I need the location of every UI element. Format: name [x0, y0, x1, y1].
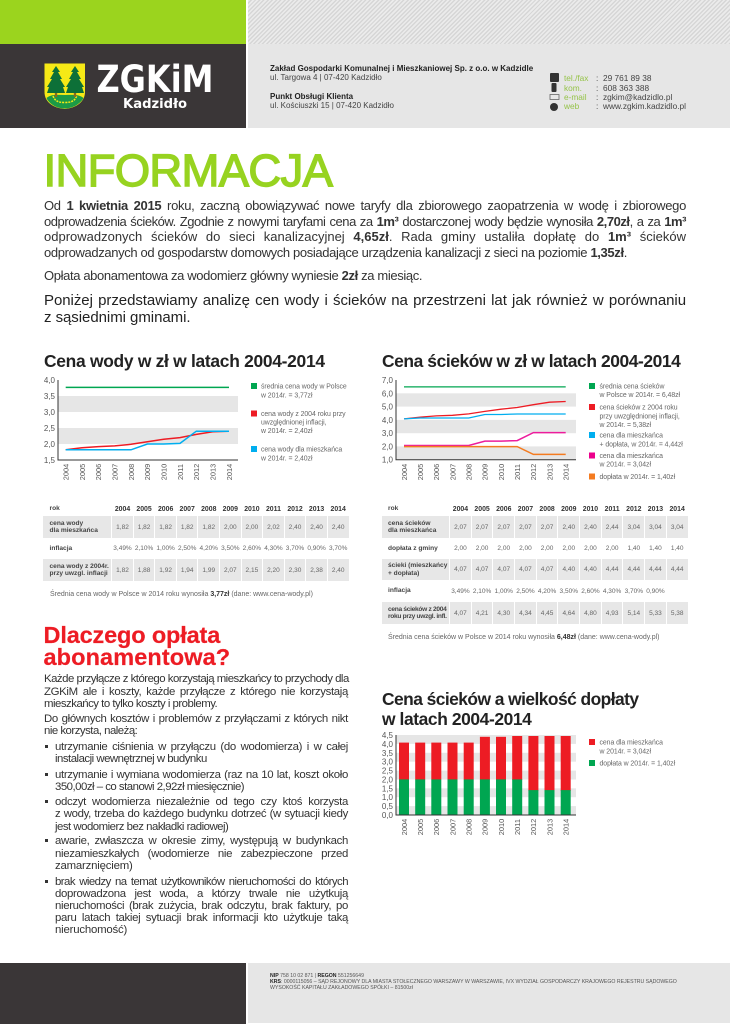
legend: water price: w 2014r. = 2,40zł [260, 428, 313, 435]
heading: why the subscription fee: abonamentowa? [44, 644, 230, 670]
chart: stacked bars: 2012 [529, 819, 538, 835]
list of problems: niezamieszkałych (wodomierze nie zabezpieczone przed [55, 848, 348, 860]
title: INFORMACJA [44, 145, 332, 196]
chart: sewage price line chart [382, 376, 576, 480]
chart: stacked bars: 2005 [416, 819, 425, 835]
list of problems: z wody, trzeba do każdego budynku dotrzeć (w sytuacji kiedy [55, 808, 348, 820]
table: sewage price: cena ścieków [388, 520, 431, 527]
table: sewage price: 2007 [518, 506, 533, 512]
table: sewage price: 2,60% [581, 588, 600, 594]
table: water price: 0,90% [307, 545, 326, 552]
table: sewage price: + dopłata) [388, 570, 419, 576]
table: sewage price: 2,00 [606, 545, 618, 552]
list of problems: awarie, zwłaszcza w okresie zimy, występują w budynkach [55, 835, 348, 847]
intro text: odprowadzonych ścieków do sieci kanalizacyjnej 4,65zł. Rada gminy ustaliła dopłatę do 1m³ ścieków [44, 229, 686, 244]
legend: water price: cena wody dla mieszkańca [261, 446, 342, 454]
table: sewage price: 2004 [453, 506, 468, 512]
table: sewage price: 4,40 [562, 566, 575, 573]
list of problems: nieruchomości (brak zużycia, brak odczytu, brak faktury, po [55, 900, 348, 912]
table: sewage price: 2,00 [562, 545, 575, 552]
table: sewage price: 3,04 [649, 524, 662, 530]
table: sewage price: 2,07 [541, 524, 553, 530]
chart: stacked bars: 4,5 [382, 731, 394, 740]
chart: water price line chart: 2010 [160, 464, 168, 480]
chart: sewage price line chart: 1,0 [382, 456, 394, 465]
company address: Punkt Obsługi Klienta [270, 92, 353, 101]
table: sewage price: 4,80 [584, 610, 597, 616]
chart: stacked bars: 2,0 [382, 775, 394, 784]
chart: stacked bars: 2,5 [382, 767, 394, 776]
table: sewage price: 2013 [648, 506, 663, 512]
list of problems: doprowadzona jest woda, a którzy trwale nie użytkują [55, 888, 348, 900]
chart: sewage price line chart: 2006 [432, 464, 441, 480]
table: sewage price: 2,40 [562, 524, 575, 530]
chart: water price line chart: 2005 [78, 464, 87, 480]
table: sewage price: 4,64 [562, 610, 575, 616]
table: sewage price: 3,50% [560, 588, 578, 594]
table: sewage price: 2012 [626, 506, 641, 512]
legend: sewage price: w 2014r. = 3,04zł [598, 462, 651, 468]
text block: why the subscription fee: Każde przyłącze z którego korzystają mieszkańcy to przychody dla [44, 673, 349, 685]
table: sewage price: 4,40 [584, 566, 597, 573]
legend: sewage price: średnia cena ścieków [600, 384, 664, 390]
table: sewage price: 5,38 [671, 610, 683, 616]
legend: sewage price: przy uwzględnionej inflacji, [600, 414, 680, 420]
table: sewage price: 5,14 [627, 610, 640, 616]
table: sewage price: 2005 [474, 506, 490, 512]
legend: sewage price: w Polsce w 2014r. = 6,48zł [598, 392, 680, 399]
contact details: e-mail [564, 92, 587, 102]
table: sewage price: 2,00 [454, 545, 467, 552]
table: sewage price: 4,44 [649, 566, 662, 573]
header band [0, 0, 730, 128]
company address: ul. Targowa 4 | 07-420 Kadzidło [270, 73, 382, 82]
contact details: 608 363 388 [603, 82, 649, 92]
table: water price: 1,82 [116, 566, 129, 574]
contact details: : [596, 82, 598, 92]
table: sewage price: 2,07 [519, 524, 532, 530]
list of problems: odczyt wodomierza niezależnie od tego czy ktoś korzysta [55, 796, 348, 808]
chart: sewage price line chart: 2007 [448, 464, 457, 480]
chart: water price line chart: 2006 [94, 464, 103, 480]
legend: water price: w 2014r. = 3,77zł [260, 392, 313, 400]
table: water price: 2,50% [178, 545, 196, 552]
table: water price: 4,30% [264, 545, 283, 552]
table: water price: 1,82 [202, 524, 215, 530]
table: water price: 2,40 [332, 566, 344, 574]
text block: why the subscription fee: nie korzysta, należą: [44, 725, 137, 737]
list of problems: brak wiedzy na temat użytkowników nieruchomości do których [55, 876, 348, 888]
table: water price: 1,88 [138, 566, 150, 574]
legend: sewage price: w 2014r. = 5,38zł [598, 422, 651, 429]
table: sewage price: 1,40 [671, 545, 683, 552]
list of problems: jest wodomierz bez nakładki radiowej) [55, 821, 228, 833]
footer company registration text: NIP 758 10 02 871 | REGON 551256649 [270, 972, 364, 978]
legend: stacked bars: dopłata w 2014r. = 1,40zł [600, 760, 676, 768]
table: sewage price: 2006 [496, 506, 511, 512]
legend: sewage price: cena ścieków z 2004 roku [600, 404, 678, 412]
intro text [44, 198, 686, 326]
heading: water price: Cena wody w zł w latach 2004-2014 [44, 351, 325, 371]
table: water price [43, 505, 349, 581]
legend: water price: w 2014r. = 2,40zł [260, 456, 313, 462]
legend: water price [251, 383, 347, 462]
table: sewage price: 2011 [605, 506, 620, 512]
chart: stacked bars: 2014 [562, 819, 570, 835]
table: sewage price: 4,30% [603, 588, 621, 594]
logo place name: Kadzidło [123, 96, 187, 112]
list of problems: utrzymanie i wymiana wodomierza (raz na 10 lat, koszt około [55, 769, 348, 781]
table: sewage price: 1,00% [495, 588, 513, 594]
chart: water price line chart: 3,0 [44, 408, 56, 417]
chart: water price line chart: 2014 [225, 464, 234, 480]
chart: stacked bars: 2013 [545, 819, 554, 835]
table: sewage price: inflacja [388, 587, 411, 594]
chart: sewage price line chart: 2009 [481, 464, 490, 480]
intro text: Opłata abonamentowa za wodomierz główny wyniesie 2zł za miesiąc. [44, 268, 422, 283]
table: sewage price: rok [388, 505, 398, 512]
table: water price: 2,30 [289, 566, 301, 574]
table: water price: 2,15 [246, 566, 258, 574]
legend: water price: uwzględnionej inflacji, [261, 420, 327, 426]
table: water price: 2,10% [135, 545, 153, 552]
table: water price: 3,50% [221, 545, 240, 552]
table: water price: 1,00% [156, 545, 175, 552]
contact details: zgkim@kadzidlo.pl [603, 92, 672, 102]
chart: sewage price line chart: 6,0 [382, 389, 394, 398]
chart: stacked bars: 2008 [464, 819, 474, 835]
contact details: www.zgkim.kadzidlo.pl [603, 101, 686, 111]
table: sewage price: 2,00 [519, 545, 532, 552]
table: water price: 2006 [158, 506, 173, 512]
table: water price: 4,20% [200, 545, 218, 552]
chart: water price line chart: 2008 [127, 464, 136, 480]
chart: stacked bars: 2011 [513, 819, 522, 835]
chart: stacked bars: 3,0 [382, 758, 394, 767]
chart: water price line chart: 2009 [143, 464, 152, 480]
table: sewage price: 3,70% [625, 588, 643, 594]
footer company registration text [270, 972, 677, 991]
table: water price: 2,00 [246, 524, 258, 530]
chart: sewage price line chart: 2004 [400, 464, 409, 480]
chart: stacked bars: 0,5 [382, 802, 394, 811]
contact details [564, 72, 686, 111]
legend: stacked bars: cena dla mieszkańca [600, 740, 663, 746]
chart: water price line chart [44, 376, 238, 480]
text block: why the subscription fee [44, 673, 350, 936]
chart: stacked bars: 2010 [497, 819, 506, 835]
chart: sewage price line chart: 2005 [416, 464, 425, 480]
contact details: kom. [564, 82, 582, 92]
icon: coat of arms shield [44, 64, 85, 109]
table: water price: 1,82 [116, 524, 129, 530]
heading: sewage price: Cena ścieków w zł w latach 2004-2014 [382, 351, 680, 371]
footer company registration text: KRS: 0000115056 – SĄD REJONOWY DLA MIASTA STOŁECZNEGO WARSZAWY W WARSZAWIE, IVX WYDZIAŁ GOSPODARCZY KRAJOWEGO REJESTRU SĄDOWEGO [270, 979, 677, 985]
dark logo block [0, 44, 246, 128]
table: sewage price: 2,44 [606, 524, 618, 530]
chart: sewage price line chart: 2011 [513, 464, 522, 480]
heading: sewage and subsidy: w latach 2004-2014 [382, 709, 531, 729]
table: sewage price: 4,07 [476, 566, 488, 573]
intro text: odprowadzenia ścieków. Zgodnie z nowymi taryfami cena za 1m³ dostarczonej wody będzie wynosiła 2,70zł, a za 1m³ [44, 214, 686, 229]
chart: sewage price line chart: 2,0 [382, 442, 394, 451]
table: sewage price: 2,00 [541, 545, 553, 552]
footer dark block [0, 963, 246, 1024]
chart: water price line chart: 2012 [192, 464, 201, 480]
table: water price: cena wody [50, 520, 83, 527]
chart: stacked bars: 2006 [432, 819, 441, 835]
contact details: : [596, 72, 598, 82]
contact details: 29 761 89 38 [603, 72, 651, 82]
list of problems: 350,00zł – co stanowi 2,92zł miesięcznie) [55, 781, 244, 793]
note: sewage price: Średnia cena ścieków w Polsce w 2014 roku wynosiła 6,48zł (dane: www.cena-wody.pl) [388, 634, 659, 641]
chart: water price line chart: 2004 [62, 464, 70, 480]
table: sewage price: 4,07 [454, 610, 467, 616]
table: water price: cena wody z 2004r. [50, 563, 109, 570]
legend: water price: średnia cena wody w Polsce [261, 384, 347, 390]
legend: sewage price: cena dla mieszkańca [600, 432, 663, 440]
heading: why the subscription fee [44, 622, 230, 670]
table: water price: 1,92 [159, 566, 172, 574]
table: sewage price: 4,07 [454, 566, 467, 573]
table: sewage price: 2,40 [584, 524, 597, 530]
table: sewage price: 2010 [583, 506, 598, 512]
company address [270, 64, 533, 110]
chart: stacked bars: 1,0 [382, 793, 394, 802]
table: water price: 2014 [330, 506, 346, 512]
table: water price: 2,40 [310, 524, 323, 530]
table: sewage price: 2014 [669, 506, 685, 512]
chart: sewage price line chart: 2014 [562, 464, 570, 480]
table: water price: 2008 [201, 506, 216, 512]
table: water price: 2,20 [267, 566, 280, 574]
table: water price: 3,70% [286, 545, 304, 552]
table: sewage price: 4,30 [497, 610, 510, 616]
table: water price: rok [50, 505, 60, 512]
table: water price: 2,00 [224, 524, 237, 530]
table: sewage price: 2,07 [454, 524, 467, 530]
table: sewage price: 2,50% [516, 588, 535, 594]
chart: stacked bars: 1,5 [382, 784, 394, 793]
chart: sewage price line chart: 2008 [464, 464, 474, 480]
green top block [0, 0, 246, 44]
table: water price: 2013 [309, 506, 324, 512]
legend: sewage price: + dopłata, w 2014r. = 4,44zł [600, 442, 683, 448]
table: water price: 3,70% [329, 545, 347, 552]
legend: sewage price [589, 383, 683, 481]
intro text: odprowadzanych od gospodarstw domowych posiadające urządzenia kanalizacji z sieci na poziomie 1,35zł. [44, 245, 627, 260]
legend: sewage price: dopłata w 2014r. = 1,40zł [600, 474, 676, 481]
legend: stacked bars: w 2014r. = 3,04zł [598, 748, 651, 756]
chart: sewage price line chart: 2010 [497, 464, 506, 480]
table: sewage price: 4,93 [606, 610, 618, 616]
intro text: Od 1 kwietnia 2015 roku, zaczną obowiązywać nowe taryfy dla zbiorowego zaopatrzenia w wodę i zbiorowego [44, 198, 686, 213]
table: sewage price: 2,00 [584, 545, 597, 552]
legend: sewage price: cena dla mieszkańca [600, 453, 663, 460]
footer band [0, 963, 730, 1024]
contact icons [550, 73, 560, 111]
chart: sewage price line chart: 5,0 [382, 403, 394, 412]
table: sewage price: 4,07 [497, 566, 510, 573]
chart: water price line chart: 2013 [208, 464, 218, 480]
table: sewage price: 4,20% [538, 588, 556, 594]
light contact block [248, 44, 730, 128]
table: water price: 2,07 [224, 566, 237, 574]
table: sewage price: 4,44 [606, 566, 618, 573]
contact details: : [596, 101, 598, 111]
text block: why the subscription fee: Do głównych kosztów i problemów z przyłączami z których nikt [44, 713, 348, 725]
chart: stacked bars [382, 731, 576, 835]
chart: water price line chart: 2,5 [44, 424, 56, 433]
chart: stacked bars: 3,5 [382, 749, 394, 758]
table: sewage price: 2,10% [473, 588, 491, 594]
list of problems: paru latach takiej sytuacji brak informacji kto użytkuje taką [55, 912, 348, 924]
table: sewage price: 3,49% [451, 588, 470, 594]
footer light block [248, 963, 730, 1023]
chart: sewage price line chart: 4,0 [382, 416, 394, 425]
chart: water price line chart: 3,5 [44, 392, 56, 401]
table: sewage price: 4,07 [519, 566, 532, 573]
chart: sewage price line chart: 7,0 [382, 376, 394, 385]
table: sewage price: 4,21 [476, 610, 488, 616]
chart: sewage price line chart: 3,0 [382, 429, 394, 438]
table: sewage price: 2,07 [476, 524, 488, 530]
contact details: web [564, 101, 579, 111]
chart: stacked bars: 0,0 [382, 811, 394, 820]
chart: water price line chart: 2011 [176, 464, 185, 480]
company address: ul. Kościuszki 15 | 07-420 Kadzidło [270, 101, 394, 110]
table: sewage price: 3,04 [627, 524, 640, 530]
table: sewage price: dla mieszkańca [388, 527, 436, 534]
list of problems: utrzymanie ciśnienia w przyłączu (do wodomierza) i w całej [55, 741, 348, 753]
table: water price: 2,60% [243, 545, 261, 552]
legend: stacked bars [589, 739, 676, 768]
table: sewage price: 3,04 [671, 524, 683, 530]
list of problems: nieruchomość) [55, 924, 127, 936]
list of problems [45, 741, 348, 936]
heading: sewage and subsidy: Cena ścieków a wielkość dopłaty [382, 689, 638, 709]
table: sewage price: 1,40 [649, 545, 662, 552]
chart: stacked bars: 2004 [400, 819, 409, 835]
chart: stacked bars: 2007 [448, 819, 457, 835]
table: water price: przy uwzgl. inflacji [50, 570, 108, 577]
table: water price: 2004 [115, 506, 130, 512]
note: water price: Średnia cena wody w Polsce w 2014 roku wynosiła 3,77zł (dane: www.cena-wody.pl) [50, 591, 313, 598]
table: water price: 2,02 [267, 524, 280, 530]
contact details: tel./fax [564, 72, 588, 82]
table: sewage price: 5,33 [649, 610, 662, 616]
table: water price: 1,82 [181, 524, 194, 530]
contact details: : [596, 92, 598, 102]
table: sewage price: 2008 [539, 506, 555, 512]
chart: stacked bars: 4,0 [382, 740, 394, 749]
text block: why the subscription fee: ZGKiM ale i koszty, każde przyłącze z którego nie korzystają [44, 686, 348, 698]
table: sewage price: ścieki (mieszkańcy [388, 562, 447, 569]
table: sewage price: 1,40 [627, 545, 640, 552]
intro text: z sąsiednimi gminami. [44, 309, 190, 326]
table: water price: 1,82 [138, 524, 150, 530]
table: water price: 2011 [266, 506, 281, 512]
heading: why the subscription fee: Dlaczego opłata [44, 622, 220, 648]
chart: sewage price line chart: 2012 [529, 464, 538, 480]
chart: water price line chart: 4,0 [44, 376, 56, 385]
table: water price: 2,38 [310, 566, 323, 574]
table: water price: 2007 [180, 506, 195, 512]
table: water price: 1,99 [202, 566, 215, 574]
table: sewage price: cena ścieków z 2004 [388, 606, 446, 613]
table: sewage price: 4,07 [541, 566, 553, 573]
legend: water price: cena wody z 2004 roku przy [261, 411, 346, 418]
table: sewage price [382, 505, 688, 624]
list of problems: instalacji wewnętrznej w budynku [55, 753, 207, 765]
text block: why the subscription fee: mieszkańcy to tylko koszty i problemy. [44, 698, 217, 710]
logo [44, 60, 214, 112]
table: sewage price: 2009 [561, 506, 576, 512]
table: sewage price: 4,44 [671, 566, 683, 573]
chart: sewage price line chart: 2013 [545, 464, 554, 480]
list of problems: zamarznięciem) [55, 860, 133, 872]
table: water price: 2,40 [332, 524, 344, 530]
footer company registration text: WYSOKOŚĆ KAPITAŁU ZAKŁADOWEGO SPÓŁKI – 81500zł [270, 985, 413, 991]
table: water price: inflacja [50, 545, 72, 552]
table: sewage price: roku przy uwzgl. infl. [388, 613, 447, 620]
table: sewage price: 4,44 [627, 566, 640, 573]
chart: water price line chart: 2,0 [44, 440, 56, 449]
table: sewage price: dopłata z gminy [388, 545, 438, 552]
table: sewage price: 2,00 [497, 545, 510, 552]
table: sewage price: 4,34 [519, 610, 532, 616]
hatched top strip [248, 0, 730, 44]
table: sewage price: 4,45 [541, 610, 553, 616]
table: sewage price: 2,00 [476, 545, 488, 552]
table: sewage price: 2,07 [497, 524, 510, 530]
chart: stacked bars: 2009 [481, 819, 490, 835]
table: water price: 2,40 [289, 524, 301, 530]
table: water price: 2012 [287, 506, 303, 512]
table: water price: 1,82 [159, 524, 172, 530]
table: water price: 2009 [223, 506, 238, 512]
chart: water price line chart: 2007 [110, 464, 120, 480]
intro text: Poniżej przedstawiamy analizę cen wody i ścieków na przestrzeni lat jak również w porównaniu [44, 292, 686, 309]
chart: water price line chart: 1,5 [44, 456, 56, 465]
table: water price: 2010 [244, 506, 260, 512]
table: water price: 3,49% [113, 545, 132, 552]
table: sewage price: 0,90% [646, 588, 665, 594]
heading: sewage and subsidy [382, 689, 639, 729]
table: water price: 1,94 [181, 566, 194, 574]
table: water price: 2005 [136, 506, 152, 512]
company address: Zakład Gospodarki Komunalnej i Mieszkaniowej Sp. z o.o. w Kadzidle [270, 64, 533, 73]
table: water price: dla mieszkańca [50, 527, 98, 534]
